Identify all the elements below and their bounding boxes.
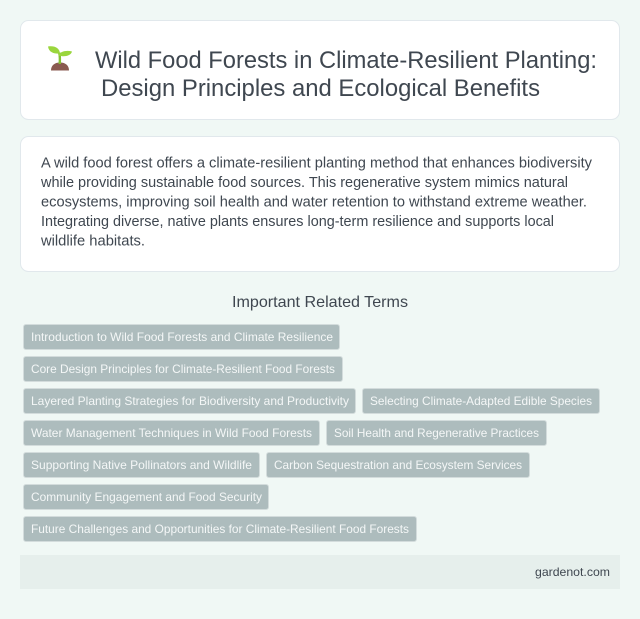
heading: important related terms: Important Related Terms <box>232 294 408 311</box>
tag: Community Engagement and Food Security <box>31 490 262 504</box>
tag: Water Management Techniques in Wild Food Forests <box>31 426 312 440</box>
tag <box>326 420 546 446</box>
tag <box>24 516 416 542</box>
tag <box>266 452 530 478</box>
text block: description: A wild food forest offers a climate-resilient planting method that enhances biodiversity <box>41 156 593 172</box>
title: Design Principles and Ecological Benefits <box>101 75 540 102</box>
tag: Introduction to Wild Food Forests and Climate Resilience <box>31 330 333 344</box>
title <box>95 47 597 102</box>
tag <box>24 452 260 478</box>
text block: description: Integrating diverse, native plants ensures long-term resilience and supports local <box>41 214 554 230</box>
title: Wild Food Forests in Climate-Resilient Planting: <box>95 47 597 74</box>
tag: Layered Planting Strategies for Biodiversity and Productivity <box>31 394 349 408</box>
panel: title card <box>20 20 620 120</box>
tag: Soil Health and Regenerative Practices <box>334 426 539 440</box>
tag: Carbon Sequestration and Ecosystem Services <box>274 458 522 472</box>
tag <box>24 420 320 446</box>
text block: description: while providing sustainable food sources. This regenerative system mimics natural <box>40 175 568 191</box>
tag <box>362 388 600 414</box>
tag <box>24 388 356 414</box>
icon: seedling <box>48 46 72 70</box>
tag list <box>24 324 600 542</box>
tag <box>24 324 340 350</box>
tag <box>24 356 342 382</box>
tag: Selecting Climate-Adapted Edible Species <box>370 394 592 408</box>
tag: Core Design Principles for Climate-Resilient Food Forests <box>31 362 335 376</box>
tag: Supporting Native Pollinators and Wildlife <box>31 458 252 472</box>
panel: description <box>20 136 620 272</box>
text block: description: wildlife habitats. <box>40 234 145 250</box>
footer <box>20 555 620 589</box>
footer source: gardenot.com <box>535 565 610 579</box>
tag <box>24 484 268 510</box>
text block: description <box>40 156 593 250</box>
tag: Future Challenges and Opportunities for Climate-Resilient Food Forests <box>31 522 409 536</box>
text block: description: ecosystems, improving soil health and water retention to withstand extreme weather. <box>41 194 587 210</box>
